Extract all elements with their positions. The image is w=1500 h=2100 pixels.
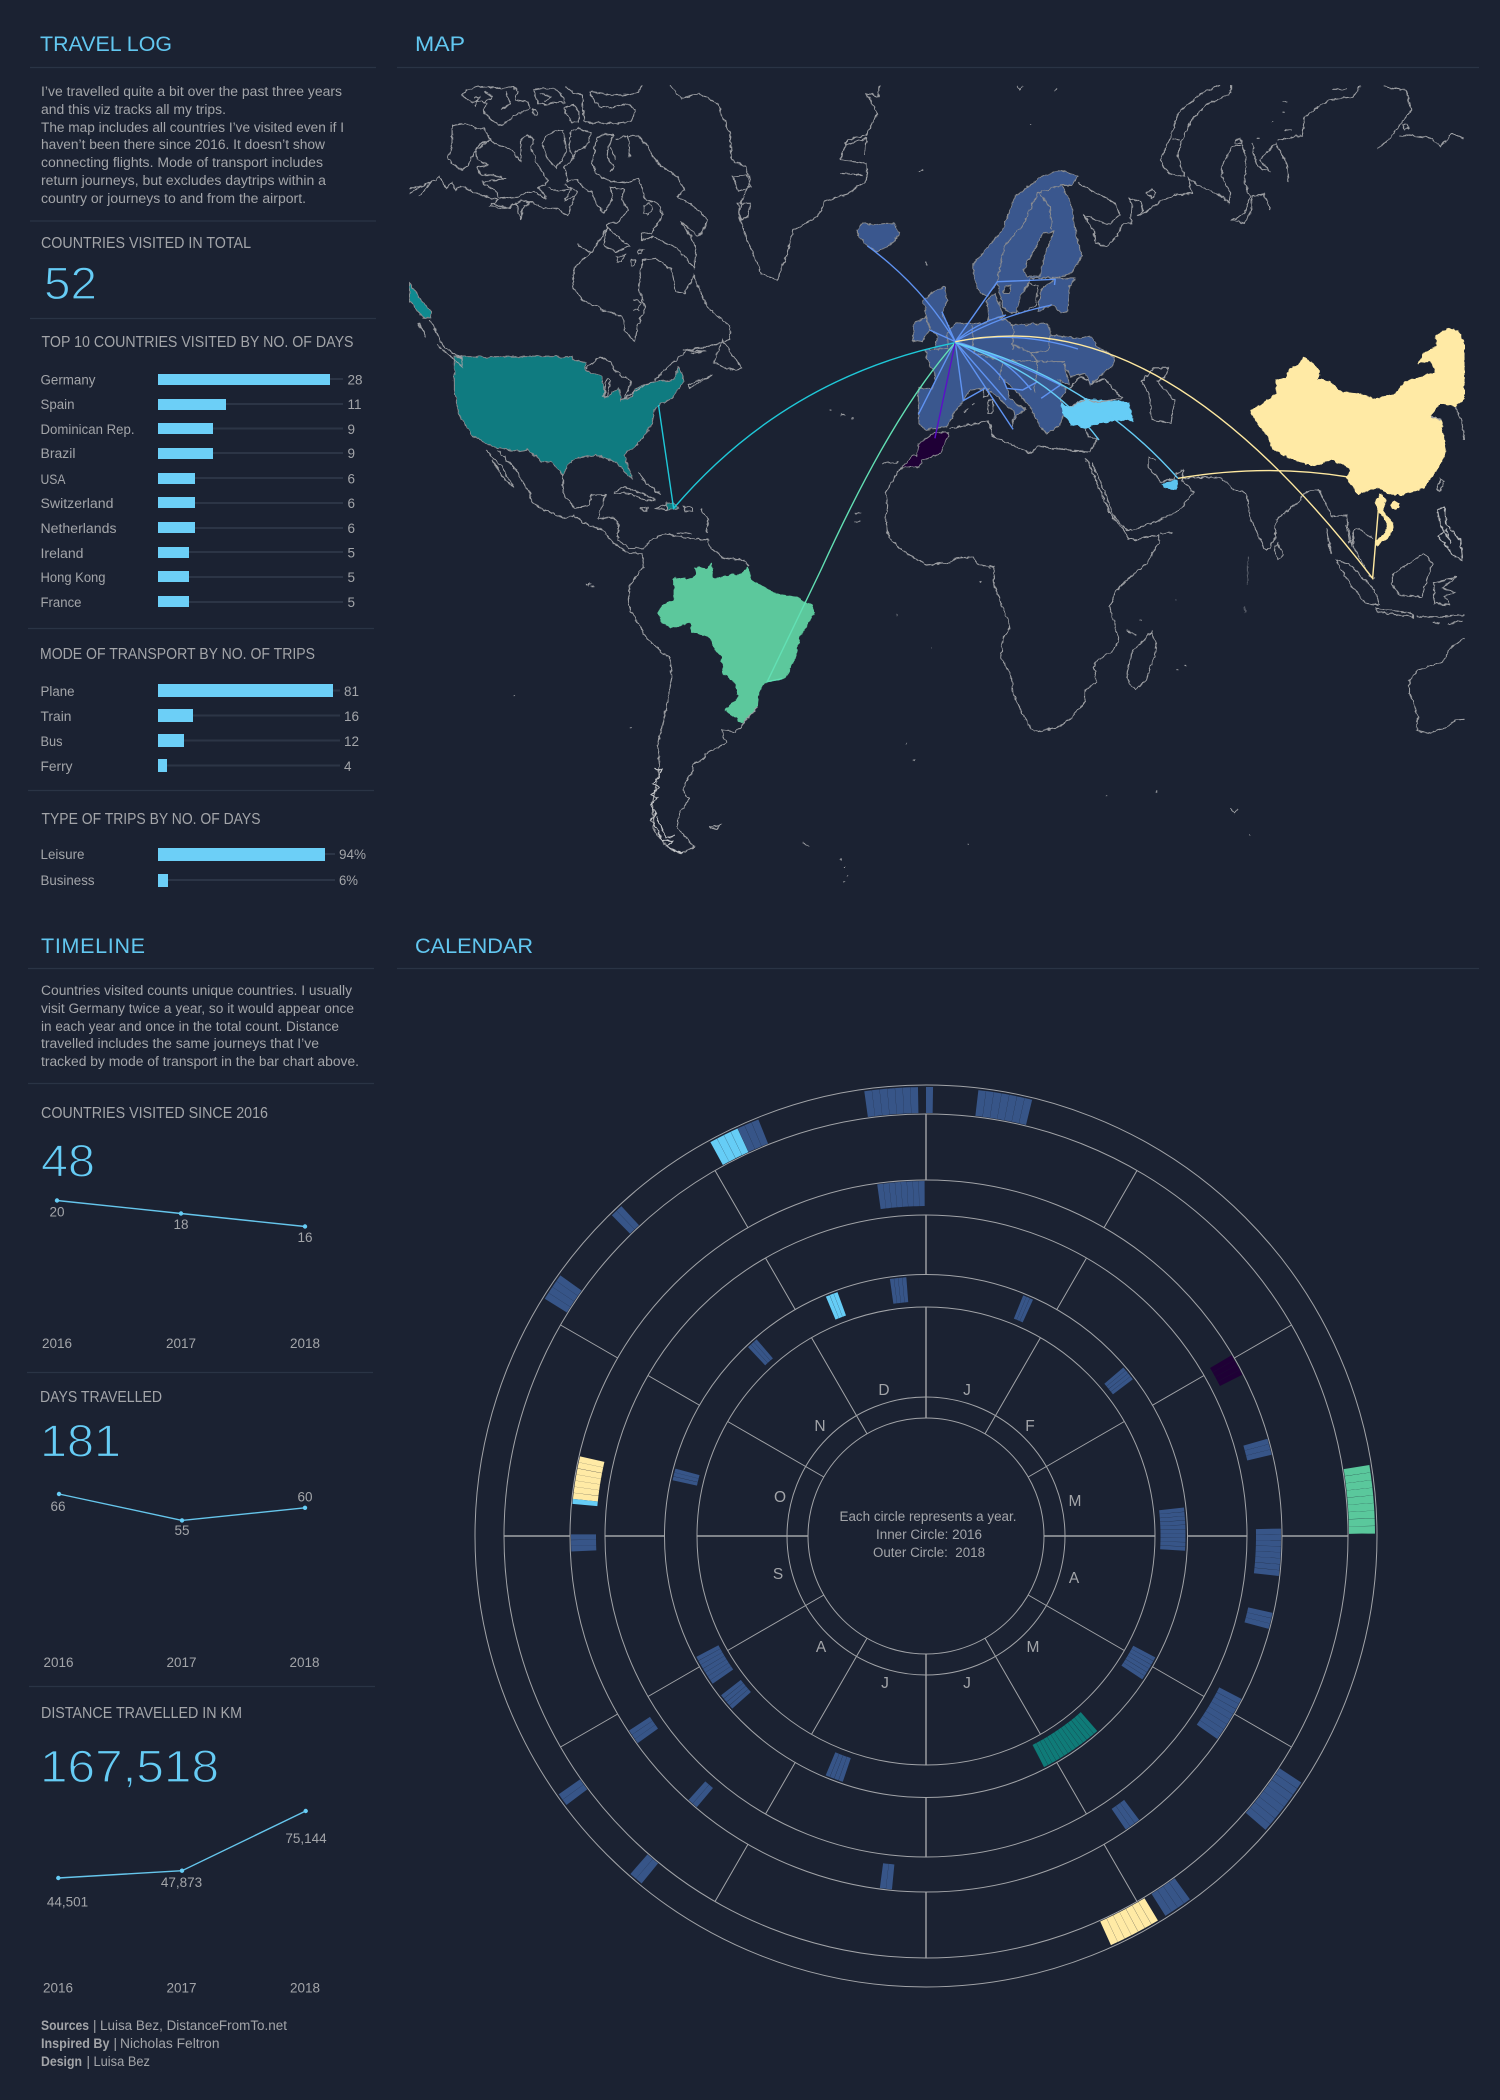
routes: flight arcs from Germany hub [659,246,1379,682]
heading: countries visited in total: COUNTRIES VISITED IN TOTAL [41,235,251,252]
heading: type of trips: TYPE OF TRIPS BY NO. OF DAYS [42,811,260,828]
heading: top 10 countries: TOP 10 COUNTRIES VISITED BY NO. OF DAYS [42,334,354,351]
row: Dominican Rep.: 9 [348,422,355,437]
trend line [59,1494,305,1520]
trip: October [685,1472,688,1483]
trip: May and June, USA [1038,1716,1089,1762]
row: Switzerland: 6 [348,496,355,511]
month labels: J [963,1382,971,1399]
row: Hong Kong [40,570,355,585]
line chart: countries visited since 2016: 2016 [42,1336,72,1351]
country: Alaska [409,283,432,318]
trip: mid March [1255,1442,1260,1458]
trip: late May [1158,1888,1182,1906]
row: Ferry [40,759,352,774]
heading: map: MAP [415,32,465,56]
row: Business [40,873,358,888]
trip: 1 January [926,1087,933,1113]
trip: October, Turkey [572,1500,598,1505]
trip: late August [569,1787,577,1797]
line chart: distance travelled: 2016 [43,1980,73,1996]
text block: introduction: The map includes all countries I’ve visited even if I [41,120,344,135]
footer: credits: Luisa Bez, DistanceFromTo.net [100,2018,287,2033]
panel: timeline [28,934,374,1084]
trip: early November [556,1282,571,1306]
text block: timeline notes: tracked by mode of transport in the bar chart above. [41,1054,359,1069]
country: USA [454,357,684,478]
country: Ireland [913,317,930,342]
line chart: days travelled: 60 [297,1490,313,1504]
trip: March, Brazil [1351,1467,1367,1534]
line chart: distance travelled: 75,144 [285,1831,327,1846]
row: Netherlands: 6 [348,521,355,536]
trip: March, Morocco [1220,1362,1232,1381]
heading: distance travelled: DISTANCE TRAVELLED IN KM [41,1705,242,1722]
countries: Scandinavia and Finland [974,170,1082,313]
text block: introduction: haven’t been there since 2016. It doesn’t show [41,137,325,152]
route: Europe blue arcs [868,246,1078,429]
trip: end of March [1168,1509,1176,1550]
row: France [40,595,355,610]
map: world map with routes [409,85,1465,883]
month labels: F [1025,1418,1035,1435]
trend line [58,1811,306,1878]
footer: credits: | [114,2036,117,2051]
route: Morocco [935,343,955,438]
country: Brazil [658,563,815,723]
line chart: countries visited since 2016: 18 [173,1217,189,1232]
text block: introduction: I’ve travelled quite a bit over the past three years [41,84,342,99]
line chart: days travelled: 2017 [166,1655,197,1670]
heading: travel log: TRAVEL LOG [40,32,172,56]
centre note: Inner Circle: 2016 [876,1527,982,1542]
trip: mid November [621,1215,630,1225]
coastlines: north-east quadrant [950,85,1465,453]
row: Germany: Germany [40,372,96,388]
month labels: J [881,1675,889,1692]
route: Turkey and UAE [955,343,1099,440]
trip: end of March [1265,1529,1269,1575]
ring: 2016 trips [685,1289,1176,1770]
calendar rings [475,1085,1377,1987]
centre note [840,1509,1016,1560]
land: countries and coastlines [409,85,1465,883]
trip: August [730,1687,742,1700]
month labels: M [1069,1493,1081,1510]
row: France: France [40,595,82,610]
text block: timeline notes: in each year and once in the total count. Distance [41,1019,339,1034]
row: Netherlands: Netherlands [40,521,117,536]
heading: mode of transport: MODE OF TRANSPORT BY NO. OF TRIPS [40,646,315,663]
trip: late December [892,1289,907,1292]
row: Ireland: Ireland [40,546,84,561]
footer: credits: | [86,2054,90,2069]
month labels: N [814,1418,826,1435]
month spokes [504,1114,1348,1958]
row: Hong Kong: 5 [348,570,355,585]
row: Leisure: Leisure [40,847,84,862]
bar chart: type of trips [40,811,366,888]
trip: late December [866,1097,918,1107]
row: Train: 16 [344,709,359,724]
country borders in Europe [971,185,1064,393]
heading: countries since 2016: COUNTRIES VISITED SINCE 2016 [41,1105,268,1122]
month labels: A [1069,1570,1080,1587]
line chart: countries visited since 2016: 16 [297,1230,313,1245]
row: Bus: Bus [40,734,63,749]
seas and large fills: north-east quadrant [971,185,1465,495]
month labels: A [816,1639,827,1656]
country: Morocco [902,432,949,467]
country: Denmark [987,293,1004,320]
line chart: days travelled: 2016 [43,1655,74,1670]
line chart: countries visited since 2016: 20 [49,1204,65,1220]
row: Brazil: 9 [348,446,355,461]
text block: introduction: country or journeys to and from the airport. [41,191,306,206]
footer: credits: Inspired By [41,2036,110,2051]
row: Leisure [40,847,366,862]
line chart: distance travelled: 2017 [166,1980,197,1996]
centre note: Each circle represents a year. [840,1509,1016,1524]
trip: late April [1207,1692,1230,1733]
panel: travel log [30,32,376,318]
row: Dominican Rep. [40,422,355,437]
footer: credits: Sources [41,2018,89,2033]
countries: continental Europe [918,317,1115,433]
trip: April [1257,1610,1260,1626]
text block: timeline notes [41,983,359,1069]
row: Plane [40,684,359,699]
row: Spain: Spain [40,397,74,412]
trip: late December [879,1190,925,1200]
trip: late August [639,1724,648,1736]
footer: credits: Luisa Bez [94,2054,150,2069]
row: Germany [40,372,363,388]
trip: July [830,1764,847,1770]
big number: 48: 48 [41,1136,95,1186]
country: Turkey [1060,398,1134,428]
row: Bus [40,734,359,749]
row: Bus: 12 [344,734,359,749]
row: Ireland [40,546,355,561]
line chart: distance travelled [40,1705,327,1996]
line chart: countries visited since 2016: 2017 [166,1336,196,1351]
trip: August [697,1791,705,1798]
text block: timeline notes: Countries visited counts unique countries. I usually [41,983,352,998]
trip: end of September [583,1534,584,1551]
row: Brazil [40,446,355,461]
row: Train: Train [40,709,72,724]
row: Plane: Plane [40,684,74,699]
footer: credits: Nicholas Feltron [120,2036,220,2051]
line chart: days travelled: 2018 [289,1655,320,1670]
line chart: distance travelled: 47,873 [161,1875,202,1890]
trip: February [1113,1376,1123,1387]
row: France: 5 [348,595,355,610]
row: USA: 6 [348,472,355,486]
text block: introduction: connecting flights. Mode of transport includes [41,155,323,170]
route: Dominican Republic and USA [659,343,955,508]
ring: 2018 trips [556,1097,1367,1936]
coastlines: south-west quadrant [486,450,950,883]
heading: calendar: CALENDAR [415,934,533,958]
month labels: D [878,1382,890,1399]
row: Ferry: Ferry [40,759,73,774]
row: Ferry: 4 [344,759,352,774]
trip: June, China [1105,1907,1151,1936]
country: Dominican Republic [667,503,679,510]
centre note: Outer Circle: 2018 [873,1545,985,1560]
route: China, Singapore, Vietnam [955,336,1379,578]
line chart: countries visited since 2016 [41,1105,320,1351]
row: Business: 6% [339,873,358,888]
country: Great Britain [923,287,952,353]
line chart: distance travelled: 2018 [290,1980,320,1996]
trip: December [743,1131,763,1141]
text block: introduction [41,84,344,206]
month labels: M [1027,1639,1039,1656]
text block: timeline notes: travelled includes the same journeys that I’ve [41,1036,319,1051]
month labels: O [774,1489,786,1506]
trip: mid November [757,1349,765,1356]
line chart: countries visited since 2016: 2018 [290,1336,320,1351]
ring: 2017 trips [583,1190,1269,1877]
trip: January [1018,1307,1028,1311]
row: Netherlands [40,521,355,536]
row: USA: USA [40,472,66,487]
line chart: days travelled: 55 [174,1523,190,1538]
row: Switzerland: Switzerland [40,496,114,511]
big number: 181: 181 [40,1416,121,1466]
row: Plane: 81 [344,684,359,699]
row: Dominican Rep.: Dominican Rep. [40,422,134,437]
trip: October, China [585,1459,592,1500]
trip: late August [706,1651,724,1677]
trip: January [976,1103,1030,1112]
trend line [57,1200,305,1226]
heading: days travelled: DAYS TRAVELLED [40,1389,162,1406]
footer: credits: Design [41,2054,82,2069]
heading: timeline: TIMELINE [41,934,145,958]
row: Ireland: 5 [348,546,355,560]
bar chart: mode of transport [40,646,359,774]
trip: July [881,1876,893,1877]
countries visited: filled shapes [409,170,1115,723]
coastlines: north-west quadrant [409,85,928,418]
row: USA [40,472,355,487]
country: China [1250,328,1465,495]
row: Hong Kong: Hong Kong [40,570,106,585]
radial calendar chart [475,1085,1377,1987]
bar chart: top 10 countries [40,334,363,610]
row: Spain: 11 [348,397,362,412]
row: Switzerland [40,496,355,511]
text block: introduction: return journeys, but excludes daytrips within a [41,173,327,188]
line chart: distance travelled: 44,501 [47,1894,88,1910]
text block: introduction: and this viz tracks all my trips. [41,102,226,117]
row: Business: Business [40,873,95,888]
month labels [773,1382,1081,1692]
trip: May [1256,1773,1290,1824]
month labels: S [773,1566,783,1583]
row: Germany: 28 [348,372,363,388]
route: Brazil [767,343,955,682]
trip: late May [1119,1810,1132,1820]
month labels: J [963,1675,971,1692]
row: Spain [40,397,362,412]
row: Brazil: Brazil [40,446,76,461]
countries: Baltics [1038,278,1075,313]
line chart: days travelled: 66 [50,1499,66,1514]
trip: late April [1132,1651,1144,1673]
text block: timeline notes: visit Germany twice a year, so it would appear once [41,1001,354,1016]
footer: credits [41,2018,287,2069]
row: Train [40,709,359,724]
line chart: days travelled [40,1389,320,1670]
trip: August [639,1864,650,1873]
coastlines: south-east quadrant [950,457,1465,844]
footer: credits: | [93,2018,97,2033]
country: Iceland [856,223,900,252]
countries: Vietnam, Hainan, UAE [1162,479,1400,547]
big number: 52: 52 [44,258,97,309]
trip: December, Turkey [717,1139,743,1154]
big number: 167,518: 167,518 [40,1741,219,1792]
row: Leisure: 94% [339,847,366,862]
trip: December, Turkey [831,1303,842,1308]
